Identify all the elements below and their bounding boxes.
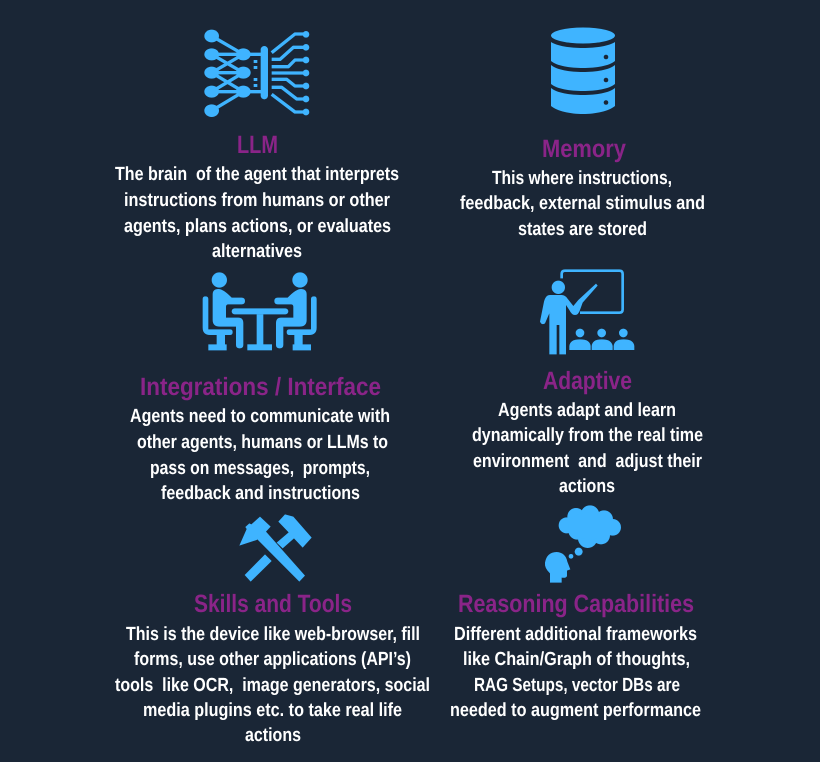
text: Skills description: forms, use other applications (API’s) xyxy=(134,649,411,670)
text: Reasoning description: needed to augment performance xyxy=(450,700,701,721)
text: Skills description: media plugins etc. to take real life xyxy=(143,700,402,721)
text: Integrations description xyxy=(130,406,390,504)
text: Memory description: This where instructions, xyxy=(492,168,672,189)
heading: Integrations / Interface: Integrations / Interface xyxy=(140,373,381,401)
icon: crossed hammers xyxy=(239,514,312,582)
icon: teacher at a board xyxy=(540,271,634,354)
text: Integrations description: other agents, humans or LLMs to xyxy=(137,432,388,453)
text: Adaptive description xyxy=(472,400,703,497)
heading: Skills and Tools: Skills and Tools xyxy=(194,590,352,618)
heading: LLM: LLM xyxy=(237,131,278,159)
icon: neural network xyxy=(204,30,309,117)
text: Reasoning description xyxy=(450,624,701,721)
icon: database xyxy=(551,28,615,114)
text: Skills description: actions xyxy=(245,725,301,746)
text: Skills description: tools like OCR, image generators, social xyxy=(115,675,430,696)
text: LLM description: agents, plans actions, or evaluates xyxy=(124,216,391,237)
text: LLM description: The brain of the agent that interprets xyxy=(115,164,399,185)
icon: head with thought cloud xyxy=(545,505,621,583)
text: Reasoning description: Different additional frameworks xyxy=(454,624,697,645)
text: Adaptive description: environment and adjust their xyxy=(473,451,703,472)
text: LLM description xyxy=(115,164,399,262)
text: Adaptive description: actions xyxy=(559,476,615,497)
text: Skills description xyxy=(115,624,430,746)
text: Integrations description: feedback and instructions xyxy=(161,483,360,504)
text: Reasoning description: RAG Setups, vector DBs are xyxy=(474,675,680,696)
text: Adaptive description: dynamically from the real time xyxy=(472,425,703,446)
icon: two people at a table xyxy=(203,272,317,350)
text: Memory description: feedback, external stimulus and xyxy=(460,193,705,214)
text: LLM description: alternatives xyxy=(212,241,302,262)
text: Adaptive description: Agents adapt and learn xyxy=(498,400,676,421)
heading: Adaptive: Adaptive xyxy=(543,367,632,395)
text: Skills description: This is the device like web-browser, fill xyxy=(126,624,420,645)
text: Integrations description: pass on messages, prompts, xyxy=(150,458,370,479)
text: Memory description: states are stored xyxy=(518,219,647,240)
text: LLM description: instructions from humans or other xyxy=(124,190,391,211)
text: Reasoning description: like Chain/Graph of thoughts, xyxy=(463,649,690,670)
heading: Reasoning Capabilities: Reasoning Capabilities xyxy=(458,590,694,618)
text: Memory description xyxy=(460,168,705,240)
heading: Memory: Memory xyxy=(542,135,626,163)
text: Integrations description: Agents need to communicate with xyxy=(130,406,390,427)
